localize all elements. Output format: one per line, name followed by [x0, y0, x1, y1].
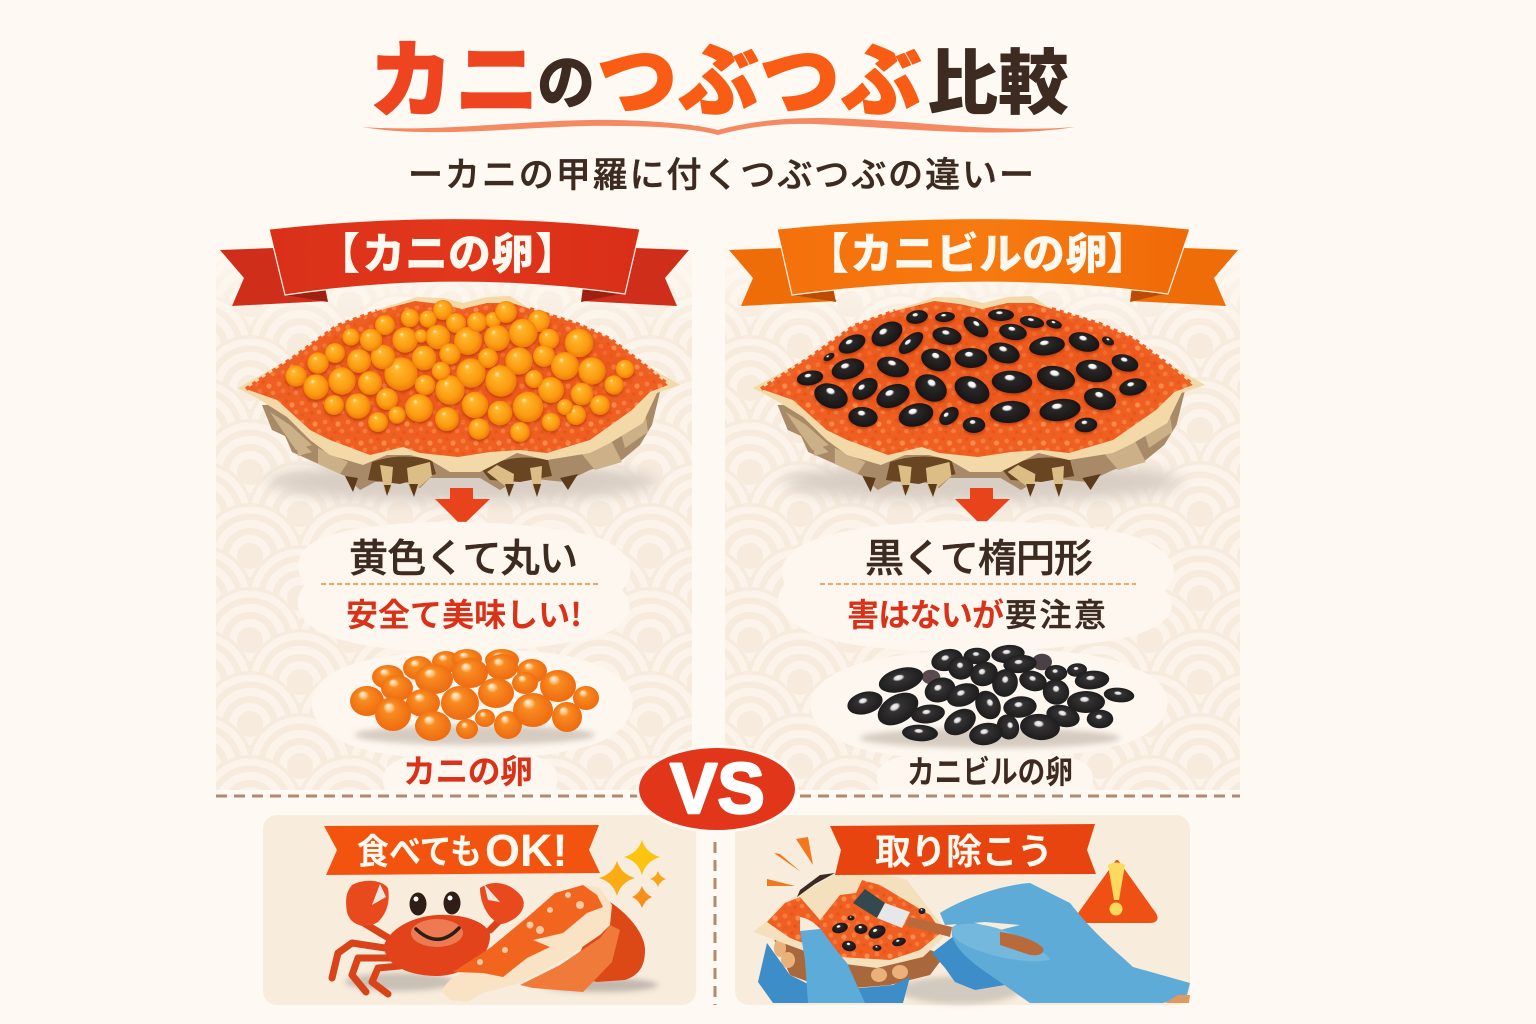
egg sample bubble right	[811, 644, 1168, 760]
label: カニビルの卵: カニビルの卵	[907, 747, 1073, 793]
icon: sparkles	[599, 840, 666, 908]
panel background pattern right	[725, 240, 1240, 790]
title: の	[537, 35, 595, 122]
banner: 食べてもOK!	[324, 824, 600, 876]
illustration: crab shell with black eggs	[753, 296, 1205, 502]
oval black eggs on shell	[796, 308, 1148, 433]
title: カニ	[369, 14, 539, 135]
banner: カニビルの卵: 【	[806, 220, 849, 282]
arrow down left	[435, 488, 490, 526]
panel background OK	[263, 815, 696, 1005]
banner: 食べてもOK!: OK!	[485, 825, 568, 876]
illustration: crab shell with yellow eggs	[238, 296, 680, 502]
egg sample bubble left	[312, 649, 633, 760]
banner: カニの卵: 】	[535, 220, 578, 282]
description bubble left	[298, 522, 631, 652]
dashed divider	[216, 796, 1240, 1005]
illustration: brush head	[853, 889, 952, 937]
pile of black eggs	[845, 644, 1135, 748]
panel: remove it	[735, 815, 1190, 1005]
pile of orange eggs	[350, 649, 599, 741]
illustration: happy cartoon crab	[332, 881, 524, 994]
crab body	[384, 915, 490, 976]
banner: 取り除こう	[830, 823, 1096, 875]
label: カニの卵: カニの卵	[403, 745, 533, 793]
black eggs	[831, 908, 926, 952]
panel: crab eggs (left)	[216, 218, 692, 793]
banner: 取り除こう: 取り除こう	[875, 823, 1053, 875]
panel background pattern left	[216, 240, 692, 790]
crab smile	[416, 928, 459, 939]
banner: 食べてもOK!: 食べても	[357, 824, 482, 875]
arrow down right	[955, 488, 1010, 526]
description bubble right	[778, 521, 1174, 652]
subtitle: ーカニの甲羅に付くつぶつぶの違いー	[408, 147, 1034, 198]
crab eyes	[410, 892, 460, 916]
panel background remove	[735, 815, 1190, 1005]
banner: カニの卵	[220, 218, 689, 306]
banner: カニの卵: 【	[317, 220, 360, 282]
description bubble right: 要注意	[1005, 590, 1106, 636]
illustration: crab shell with meat	[442, 885, 658, 1002]
title	[369, 14, 1069, 135]
crab claws	[346, 881, 389, 926]
VS badge	[636, 745, 798, 833]
illustration: right gloved hand	[932, 883, 1190, 1003]
panel: leech eggs (right)	[725, 218, 1240, 793]
banner: カニビルの卵	[729, 218, 1238, 306]
panel: OK to eat	[263, 815, 696, 1005]
description bubble right: 黒くて楕円形	[865, 528, 1093, 584]
title underline swoosh	[362, 118, 1075, 135]
banner: カニビルの卵: カニビルの卵	[850, 220, 1108, 282]
VS badge: VS	[670, 750, 765, 829]
illustration: shell with black eggs	[753, 872, 1020, 1004]
description bubble right: 害はないが	[847, 590, 1004, 636]
icon: alert burst lines	[767, 837, 813, 886]
icon: warning triangle	[1078, 862, 1156, 921]
crab legs	[332, 912, 500, 994]
round orange eggs on shell	[285, 300, 634, 442]
illustration: left gloved hand	[758, 917, 910, 1003]
title: 比較	[927, 27, 1069, 129]
description bubble left: 安全て美味しい!	[346, 590, 582, 636]
banner: カニビルの卵: 】	[1106, 220, 1149, 282]
description bubble left: 黄色くて丸い	[349, 528, 578, 584]
banner: カニの卵: カニの卵	[362, 220, 534, 282]
title: つぶつぶ	[597, 17, 921, 133]
